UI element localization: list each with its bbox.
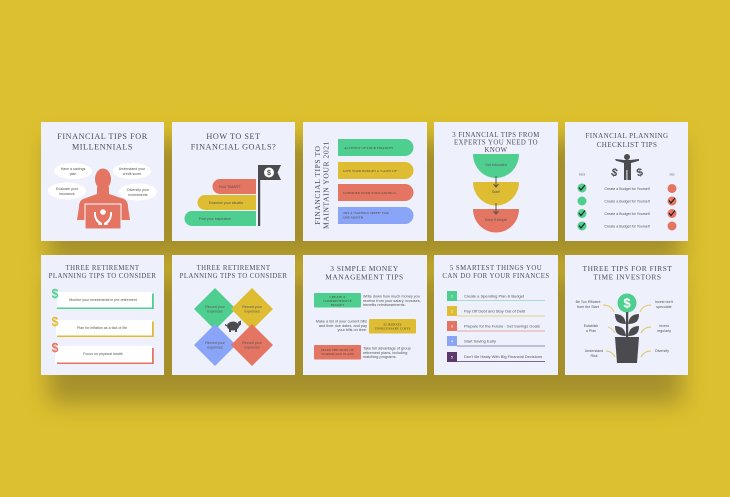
tip descriptions: Take full advantage of group <box>363 346 411 350</box>
funnel half circles <box>473 154 519 232</box>
diamonds: Record your <box>242 305 262 309</box>
column labels <box>579 172 675 176</box>
labels <box>576 300 673 358</box>
bubble text: credit score <box>123 172 141 176</box>
labels: Diversify <box>655 349 669 353</box>
panel: how to set financial goals <box>172 122 295 241</box>
tip descriptions: Make a list of your current bills <box>316 320 367 324</box>
title: CHECKLIST TIPS <box>597 141 657 149</box>
panel: 5 smartest things <box>434 255 558 375</box>
title: THREE RETIREMENT <box>197 265 270 272</box>
tip descriptions: your bills on time. <box>337 328 367 332</box>
stepped bars: Find 'SMART' <box>219 185 241 189</box>
title: EXPERTS YOU NEED TO <box>454 140 538 146</box>
panel: three retirement tips (diamonds) <box>172 255 295 375</box>
pill list: CONSIDER YOUR YOUR SAVINGS <box>343 191 396 195</box>
diamonds: expenses <box>207 346 223 350</box>
title: KNOW <box>485 147 508 154</box>
panel: financial tips for millennials <box>41 122 164 241</box>
tip boxes: MAKE THE MOST OF <box>321 348 354 352</box>
tip boxes <box>314 293 416 360</box>
labels: Establish <box>584 324 598 328</box>
title: MILLENNIALS <box>72 142 133 152</box>
title: MANAGEMENT TIPS <box>325 272 404 282</box>
column labels: YES <box>579 172 585 176</box>
panel: financial planning checklist <box>565 122 688 241</box>
tip boxes: COMPREHENSIVE <box>323 299 352 303</box>
speech bubbles <box>48 163 157 200</box>
title: FINANCIAL GOALS? <box>191 142 276 152</box>
title: 3 FINANCIAL TIPS FROM <box>452 132 540 139</box>
panel: three tips for first time investors <box>565 255 688 375</box>
funnel half circles: Start! <box>492 190 500 194</box>
numbered list: Don't Be Hasty With Big Financial Decisions <box>464 354 542 359</box>
arrows <box>494 176 498 214</box>
diamonds: Record your <box>205 341 225 345</box>
column labels: NO <box>670 172 675 176</box>
title: PLANNING TIPS TO CONSIDER <box>49 273 156 280</box>
panel shadows <box>48 140 682 403</box>
numbered list: Prepare for the Future - Set Savings Goals <box>464 324 540 328</box>
labels: speculate <box>656 305 672 309</box>
icon: businessman with dollars: $ <box>635 166 644 180</box>
tip boxes: CREATE A <box>330 295 345 299</box>
cards <box>55 292 154 364</box>
title: FINANCIAL PLANNING <box>585 132 669 140</box>
bubble text: insurance <box>59 192 75 196</box>
dollar icons: $ <box>52 287 59 301</box>
labels: from the Start <box>577 305 599 309</box>
panel: 3 simple money management tips <box>303 255 427 375</box>
numbered list: Start Saving Early <box>464 338 496 344</box>
tip boxes: WORKPLACE PLANS <box>321 352 354 356</box>
stepped bars: Find your inspiration <box>199 217 231 221</box>
panel: financial tips to maintain <box>303 122 427 241</box>
checklist text: Create a Budget for Yourself <box>604 224 650 228</box>
dollar icons <box>52 287 59 355</box>
vertical title: FINANCIAL TIPS TO <box>313 145 322 225</box>
bubble text: Have a savings <box>61 167 85 171</box>
numbered list: 2 <box>451 308 454 314</box>
numbered list: Pay Off Debt and Stay Out of Debt <box>464 308 526 314</box>
tip descriptions: benefits reimbursements. <box>363 303 406 307</box>
cards: Monitor your investments in pre-retirement <box>69 298 137 302</box>
checklist text: Create a Budget for Yourself <box>604 212 650 216</box>
labels: regularly <box>657 329 671 333</box>
title: THREE RETIREMENT <box>66 265 139 272</box>
diamonds: Record your <box>242 341 262 345</box>
stepped bars: Examine your situatio <box>209 201 243 205</box>
bubble text: plan <box>70 172 76 176</box>
numbered list: 4 <box>451 338 454 344</box>
tip boxes: UNNECESSARY COSTS <box>375 326 410 330</box>
numbered list <box>447 291 545 362</box>
labels: Be Too Efficient <box>576 300 600 304</box>
numbered list: 5 <box>451 354 454 360</box>
stepped bars <box>185 179 256 226</box>
labels: Invest <box>659 324 669 328</box>
check circles <box>578 184 676 230</box>
checklist text <box>604 187 650 228</box>
pill list: GIVE YOUR BUDGET A "GLOW UP" <box>343 169 398 173</box>
pill list: ACTIVELY UP YOUR FINANCES <box>344 146 393 150</box>
labels: Risk <box>590 354 598 358</box>
diamonds: expenses <box>207 310 223 314</box>
tip descriptions: matching programs. <box>363 355 397 359</box>
icon: businessman with dollars: $ <box>610 166 619 180</box>
tip descriptions: and their due dates, and pay <box>319 324 367 328</box>
panel: 3 financial tips from experts <box>434 122 558 241</box>
icon: flag with dollar: $ <box>267 170 271 177</box>
bubble text: Understand your <box>119 167 145 171</box>
numbered list: 1 <box>451 294 454 298</box>
title: PLANNING TIPS TO CONSIDER <box>180 273 287 280</box>
title: HOW TO SET <box>206 132 261 141</box>
dollar icons: $ <box>52 315 59 329</box>
pill list <box>338 139 414 224</box>
title: TIME INVESTORS <box>593 272 662 282</box>
tip boxes: BUDGET <box>331 303 345 307</box>
cards: Focus on physical health <box>83 352 123 356</box>
diamonds: Record your <box>205 305 225 309</box>
diamonds <box>194 288 273 366</box>
tip boxes: ELIMINATE <box>383 322 402 326</box>
cards: Plan for inflation as a fact of life <box>77 326 127 330</box>
icon: businessman with dollars <box>610 154 644 180</box>
title: CAN DO FOR YOUR FINANCES <box>442 273 550 280</box>
bubble text <box>56 167 150 197</box>
tip descriptions: Write down how much money you <box>363 294 420 298</box>
bubble text: Evaluate your <box>56 187 78 191</box>
dollar icons: $ <box>52 341 59 355</box>
diamonds: expenses <box>244 346 260 350</box>
numbered list: Create a Spending Plan & Budget <box>464 294 525 298</box>
tip descriptions: receive from your salary, bonuses, <box>363 299 421 303</box>
funnel half circles: Get educated <box>485 163 507 167</box>
pill list: ONE MONTH <box>343 216 364 220</box>
diamonds: expenses <box>244 310 260 314</box>
checklist text: Create a Budget for Yourself <box>604 187 650 191</box>
title: FINANCIAL TIPS FOR <box>57 132 148 141</box>
icon: person with laptop <box>77 168 130 229</box>
icon: money plant: $ <box>623 296 631 310</box>
funnel half circles: Keep it simple <box>485 218 507 222</box>
tip descriptions: retirement plans, including <box>363 351 407 355</box>
title: THREE TIPS FOR FIRST <box>583 264 672 273</box>
pill list: TRY A "SAVINGS SPREE" FOR <box>343 211 389 215</box>
labels: a Plan <box>586 329 596 333</box>
title: 3 SIMPLE MONEY <box>330 264 399 273</box>
vertical title: MAINTAIN YOUR 2021 <box>322 141 330 229</box>
labels: Invest don't <box>655 300 673 304</box>
bubble text: Diversify your <box>127 188 149 192</box>
labels: Understand <box>585 349 603 353</box>
icon: piggy bank <box>225 320 241 332</box>
checklist text: Create a Budget for Yourself <box>604 200 650 204</box>
curved arrows <box>603 305 651 357</box>
numbered list: 3 <box>451 324 454 328</box>
title: 5 SMARTEST THINGS YOU <box>450 265 542 272</box>
bubble text: investments <box>128 193 148 197</box>
tip descriptions <box>316 294 421 359</box>
panel: three retirement tips (list) <box>41 255 164 375</box>
